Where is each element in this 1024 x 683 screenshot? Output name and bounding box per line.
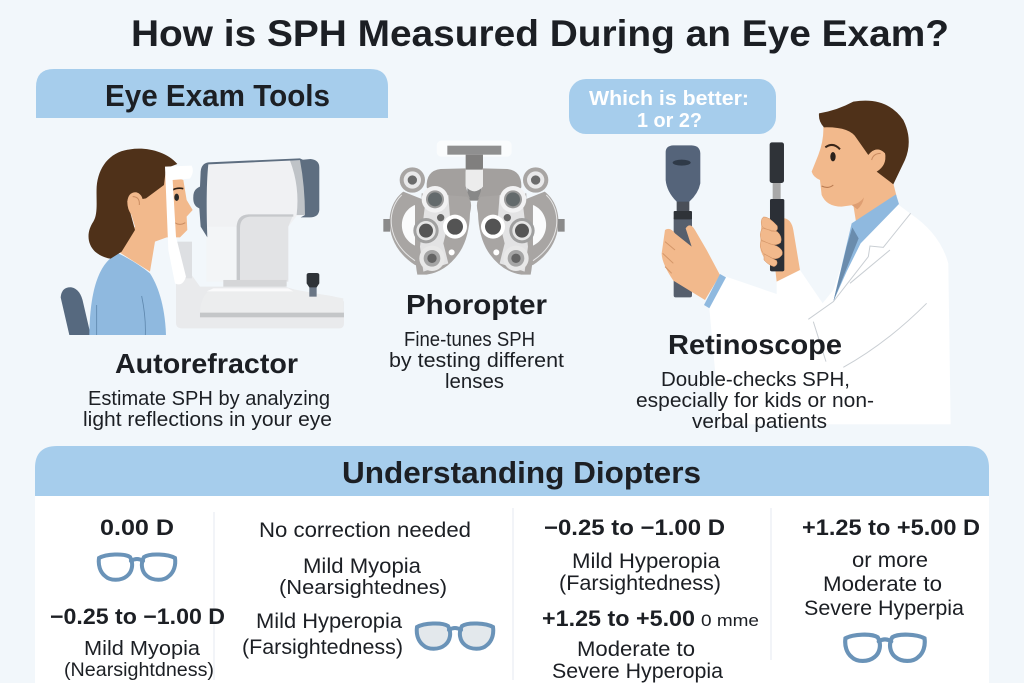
panel: eye exam tools heading: Eye Exam Tools [105,78,330,113]
column 3: Mild Hyperopia [572,550,720,573]
column 3: (Farsightedness) [559,572,721,595]
title: How is SPH Measured During an Eye Exam? [131,13,949,54]
icon: glasses [99,554,175,580]
column 1: 0.00 D [100,515,174,540]
column 3: Severe Hyperopia [552,660,723,683]
coat lines [808,213,927,367]
face and neck [120,170,193,272]
column 4 [802,515,980,661]
column 1: −0.25 to −1.00 D [50,604,225,629]
column 1 [50,515,225,681]
text block: autorefractor: Autorefractor [115,348,298,379]
text block: retinoscope: verbal patients [692,410,827,433]
illustration: autorefractor [61,149,344,335]
illustration: phoropter [383,141,565,275]
column 2: Mild Hyperopia [256,610,402,633]
callout: which is better: Which is better: [589,87,749,110]
column 3: −0.25 to −1.00 D [544,515,725,540]
left hand [662,225,720,300]
column 3: Moderate to [577,638,695,661]
column 3: 0 mme [701,611,759,630]
text block: phoropter [389,289,564,393]
callout: which is better [569,79,776,134]
hair [819,101,909,184]
lab coat [709,203,951,424]
shirt and tie [833,194,899,302]
text block: phoropter: by testing different [389,350,564,372]
text block: autorefractor: Estimate SPH by analyzing [88,387,330,410]
text block: retinoscope: Double-checks SPH, [661,368,850,391]
illustration: doctor with retinoscope [662,101,951,424]
text block: phoropter: Fine-tunes SPH [404,329,535,351]
column 3: +1.25 to +5.00 [542,606,695,631]
text block: autorefractor [83,348,332,431]
column 2: No correction needed [259,519,471,542]
column 4: Severe Hyperpia [804,597,964,620]
text block: autorefractor: light reflections in your eye [83,408,332,431]
shirt [89,253,166,335]
face details [830,152,836,161]
right hand fingers [760,217,782,267]
right retinoscope [773,182,781,200]
column 4: or more [852,549,928,572]
white strap [165,166,193,284]
text block: retinoscope: Retinoscope [668,329,842,360]
column 3 [542,515,759,683]
ear [127,192,143,215]
column 2: Mild Myopia [303,555,421,578]
panel: eye exam tools heading [36,69,388,118]
text block: phoropter: Phoropter [406,289,547,320]
column 2: (Nearsightednes) [279,576,447,599]
column 1: Mild Myopia [84,637,201,660]
heading: understanding diopters: Understanding Diopters [342,455,701,490]
column 2: (Farsightedness) [242,636,403,659]
neck and face [812,110,907,222]
column 4: Moderate to [823,573,942,596]
column 4: +1.25 to +5.00 D [802,515,980,540]
icon: glasses [845,635,925,661]
text block: retinoscope: especially for kids or non- [636,389,874,412]
text block: retinoscope [636,329,874,433]
icon: tinted glasses [417,623,493,649]
column 2 [242,519,493,659]
callout: which is better: 1 or 2? [637,109,702,132]
ear [868,150,885,172]
hair [89,149,177,259]
text block: phoropter: lenses [445,371,504,393]
column 1: (Nearsightdness) [64,659,214,681]
eye details [173,188,183,190]
chair [61,287,91,335]
left retinoscope [674,217,692,297]
panel: understanding diopters [35,446,989,683]
heading: understanding diopters [35,446,989,496]
right hand palm [760,218,800,282]
